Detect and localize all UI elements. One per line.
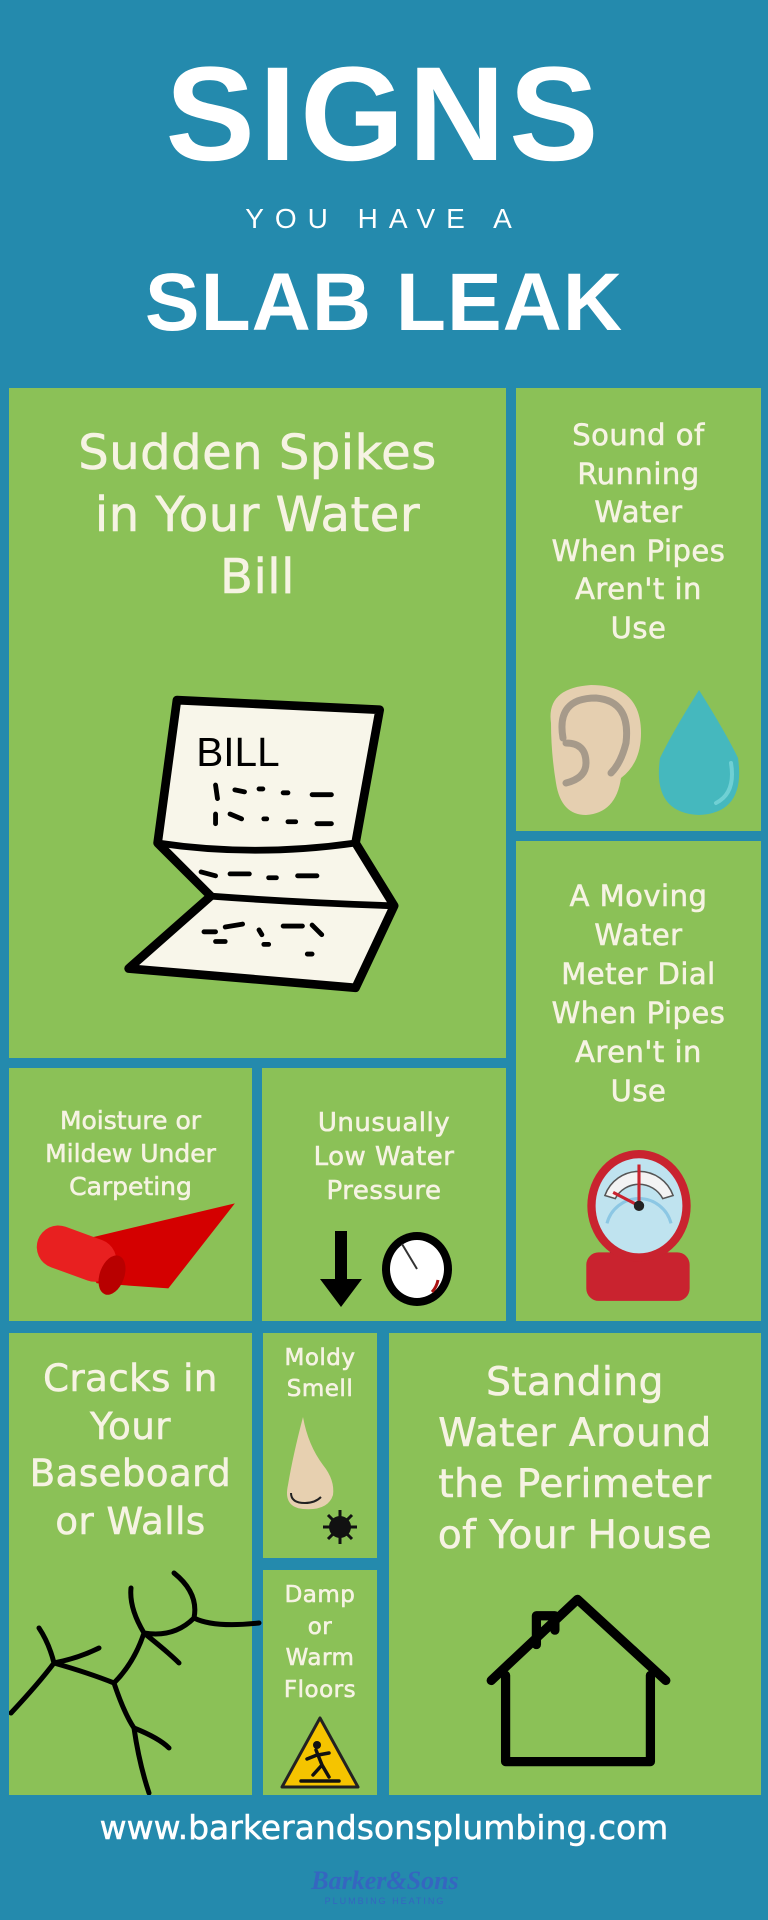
heading: sound: Running [577, 456, 700, 490]
heading: meter dial [552, 879, 725, 1108]
panel: moisture under carpeting [9, 1068, 252, 1321]
icon: gauge [586, 1150, 691, 1301]
heading: damp: or [308, 1614, 332, 1640]
heading: sound [552, 418, 725, 644]
heading: sudden spikes: in Your Water [95, 487, 420, 543]
logo: PLUMBING HEATING [325, 1896, 445, 1906]
panel: water bill [9, 388, 506, 1058]
heading: standing water: the Perimeter [438, 1462, 712, 1507]
heading: moldy: Moldy [284, 1345, 356, 1371]
panel: low water pressure [262, 1068, 506, 1321]
heading: moisture: Moisture or [60, 1106, 201, 1135]
heading: sound: When Pipes [552, 534, 725, 568]
heading: sudden spikes [78, 425, 437, 605]
subheading: you have a: YOU HAVE A [245, 203, 523, 234]
heading: moisture: Mildew Under [45, 1139, 216, 1168]
heading: sound: Sound of [572, 418, 705, 452]
heading: standing water: of Your House [438, 1513, 712, 1558]
footer url: www.barkerandsonsplumbing.com [100, 1808, 668, 1847]
heading: meter dial: A Moving [570, 879, 707, 913]
panel: cracks [9, 1333, 252, 1795]
icon: carpet [36, 1203, 235, 1295]
icon: mold splat [323, 1510, 357, 1544]
heading: meter dial: When Pipes [552, 996, 725, 1030]
heading: cracks: Baseboard [30, 1452, 231, 1495]
icon: down arrow [320, 1231, 362, 1307]
heading: sudden spikes: Bill [220, 549, 295, 605]
icon: ear [550, 685, 641, 815]
heading: moldy: Smell [287, 1376, 353, 1402]
heading: SIGNS: SIGNS [166, 40, 602, 189]
icon: nose [287, 1417, 334, 1510]
heading: moldy [284, 1345, 356, 1402]
icon: crack [9, 1570, 262, 1795]
heading: moisture: Carpeting [69, 1172, 192, 1201]
heading: pressure [314, 1108, 454, 1206]
panel: moving water meter [516, 841, 761, 1321]
panel: damp floors [263, 1570, 377, 1795]
heading: cracks: Your [90, 1404, 171, 1448]
heading: cracks [30, 1357, 231, 1542]
heading: meter dial: Aren't in [575, 1035, 702, 1069]
heading: sudden spikes: Sudden Spikes [78, 425, 437, 481]
heading: pressure: Unusually [318, 1108, 450, 1138]
heading: sound: Water [594, 495, 683, 529]
panel: moldy smell [263, 1333, 377, 1558]
icon: bill [124, 696, 399, 992]
heading: pressure: Pressure [326, 1176, 442, 1206]
panel: standing water [389, 1333, 761, 1795]
heading: cracks: or Walls [55, 1500, 206, 1542]
heading: sound: Aren't in [575, 572, 702, 606]
heading: meter dial: Water [594, 918, 683, 952]
icon: house [486, 1594, 670, 1766]
heading: slab leak: SLAB LEAK [145, 257, 623, 348]
icon: wet floor warning [280, 1716, 360, 1788]
heading: sound: Use [611, 610, 666, 644]
icon: pressure dial [382, 1232, 452, 1306]
icon: water drop [658, 690, 740, 815]
heading: meter dial: Use [611, 1074, 666, 1108]
heading: pressure: Low Water [314, 1142, 454, 1172]
heading: meter dial: Meter Dial [561, 957, 716, 991]
heading: moisture [45, 1106, 216, 1201]
title [145, 40, 623, 348]
heading: standing water [438, 1360, 712, 1558]
heading: standing water: Standing [486, 1360, 664, 1405]
icon: bill: BILL [196, 729, 280, 775]
heading: cracks: Cracks in [43, 1357, 218, 1400]
heading: damp: Warm [286, 1645, 354, 1671]
logo: Barker&Sons [311, 1866, 459, 1895]
panel: sound of running water [516, 388, 761, 831]
heading: damp: Damp [285, 1582, 355, 1608]
heading: standing water: Water Around [438, 1411, 712, 1456]
heading: damp: Floors [284, 1676, 356, 1702]
heading: damp [284, 1582, 356, 1702]
